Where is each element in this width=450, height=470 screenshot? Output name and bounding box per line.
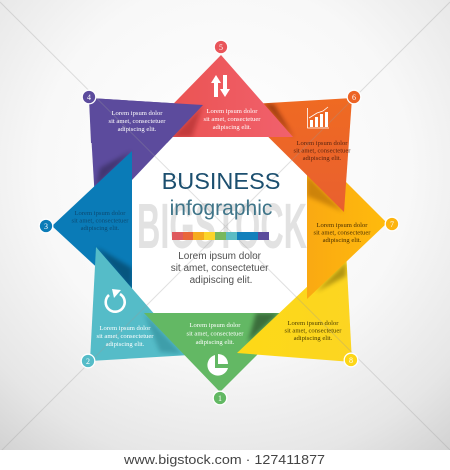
text: amber: Lorem ipsum dolor [317,222,368,229]
text: teal: adipiscing elit. [106,341,145,348]
text: purple: sit amet, consectetuer [109,118,166,125]
panel 6: orange triangle [236,98,352,212]
panel 7: amber triangle [307,143,387,299]
shadow: amber on yellow [316,262,346,292]
shadow: teal on blue [98,248,132,288]
shadow: yellow on green [248,313,279,342]
title: BUSINESS [162,168,280,194]
panel 8: yellow triangle [237,250,352,362]
rainbow bar [172,232,269,240]
subtitle: infographic [170,197,272,220]
text: purple: adipiscing elit. [118,126,157,133]
panel 3: blue triangle [52,151,132,300]
badge 5: 5 [219,43,223,52]
footer [0,450,450,470]
text: orange: adipiscing elit. [303,155,342,162]
badge 2: 2 [86,357,90,366]
badge 1 [213,391,227,405]
text: yellow: adipiscing elit. [294,335,333,342]
badge 5 [214,40,228,54]
shadow: blue on purple [96,152,129,184]
panel 4: purple triangle [89,98,203,218]
panel 2: teal triangle [90,247,190,361]
badge 2 [81,354,95,368]
text: yellow: sit amet, consectetuer [285,328,342,334]
badge 6 [347,90,361,104]
text: teal: Lorem ipsum dolor [100,325,151,332]
badge 6: 6 [352,93,356,102]
text: yellow: Lorem ipsum dolor [288,320,339,327]
text: amber: sit amet, consectetuer [314,230,371,236]
shadow: purple on red [174,107,203,137]
text: green: Lorem ipsum dolor [190,322,241,329]
text: purple: Lorem ipsum dolor [112,110,163,117]
center text: adipiscing elit. [190,275,252,286]
badge 8 [344,353,358,367]
text: red: adipiscing elit. [213,124,252,131]
shadow: orange on amber [307,175,344,212]
text: blue: adipiscing elit. [81,225,120,232]
badge 1: 1 [218,394,222,403]
badge 7: 7 [390,220,394,229]
text: green: sit amet, consectetuer [187,330,244,338]
text: orange: Lorem ipsum dolor [297,140,348,147]
panel 5: red triangle [141,55,293,137]
badge 4 [82,90,96,104]
text: amber: adipiscing elit. [323,237,362,244]
badge 7 [385,217,399,231]
badge 3: 3 [44,222,48,231]
icon: pie chart [207,354,228,376]
shadow: red on orange [264,102,293,136]
panel 1: green triangle [144,313,299,392]
icon: up and down arrows [211,75,230,97]
text: green: adipiscing elit. [196,339,235,346]
icon: circular arrow [106,289,125,312]
text: blue: sit amet, consectetuer [72,218,129,224]
shadow: green on teal [146,316,180,355]
text: blue: Lorem ipsum dolor [75,210,126,217]
text: orange: sit amet, consectetuer [294,148,351,154]
footer credit: www.bigstock.com · 127411877 [123,452,325,467]
center text: Lorem ipsum dolor [178,251,262,262]
center text: sit amet, consectetuer [171,263,269,274]
badge 3 [39,219,53,233]
badge 4: 4 [87,93,91,102]
text: teal: sit amet, consectetuer [97,333,154,340]
panel 4: purple tip over red [89,98,203,143]
text: red: Lorem ipsum dolor [207,108,258,115]
text: red: sit amet, consectetuer [204,116,261,123]
badge 8: 8 [349,356,353,365]
icon: bar chart [308,107,329,128]
panel: center [125,130,315,320]
